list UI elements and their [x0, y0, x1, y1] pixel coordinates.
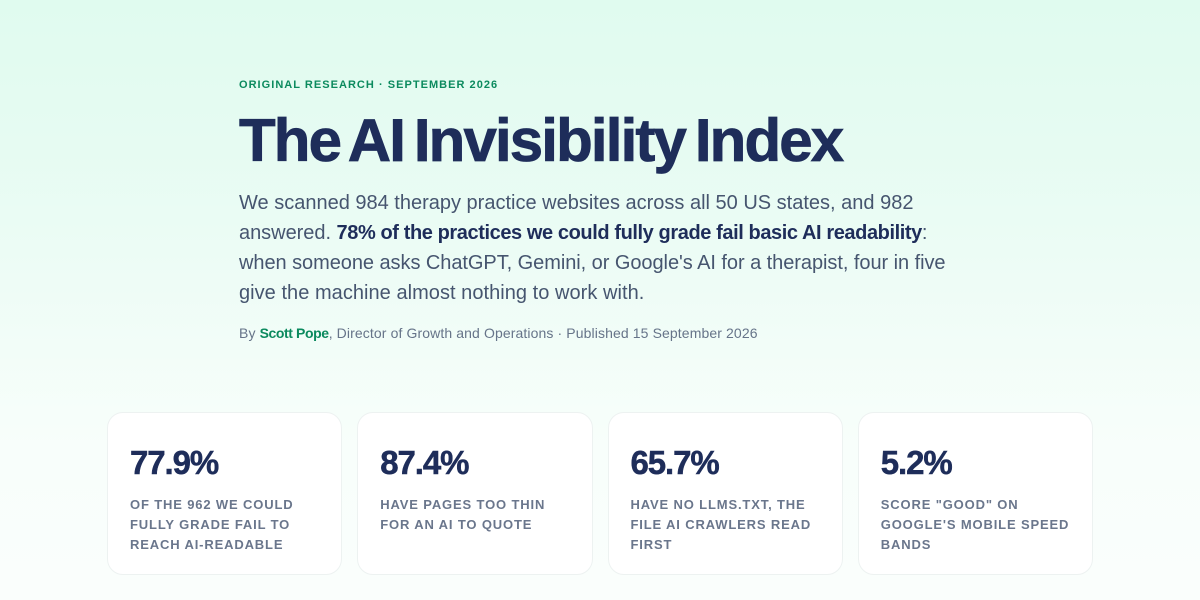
stat label [130, 497, 294, 552]
stat value: 65.7% [630, 444, 719, 481]
title: The AI Invisibility Index [239, 107, 842, 174]
stat card 4 [858, 412, 1093, 575]
stat label: FULLY GRADE FAIL TO [130, 517, 290, 532]
stat label: FOR AN AI TO QUOTE [380, 517, 532, 532]
stat label [380, 497, 545, 532]
eyebrow: ORIGINAL RESEARCH · SEPTEMBER 2026 [239, 79, 498, 91]
stat label [630, 497, 811, 552]
byline: By Scott Pope, Director of Growth and Operations · Published 15 September 2026 [239, 325, 758, 341]
stat card 2 [357, 412, 592, 575]
stat card 1 [107, 412, 342, 575]
stat label: FIRST [630, 537, 672, 552]
stat value: 5.2% [881, 444, 952, 481]
stat card 3 [608, 412, 843, 575]
stat label: HAVE PAGES TOO THIN [380, 497, 545, 512]
stat label: BANDS [881, 537, 931, 552]
stat value: 87.4% [380, 444, 468, 481]
stat label: REACH AI-READABLE [130, 537, 283, 552]
stat label: GOOGLE'S MOBILE SPEED [881, 517, 1069, 532]
intro paragraph [239, 192, 945, 304]
stat label: OF THE 962 WE COULD [130, 497, 294, 512]
intro paragraph: give the machine almost nothing to work with. [239, 282, 644, 304]
intro paragraph: We scanned 984 therapy practice websites across all 50 US states, and 982 [239, 192, 913, 214]
stat label: SCORE "GOOD" ON [881, 497, 1019, 512]
stat value: 77.9% [130, 444, 218, 481]
stat label [881, 497, 1069, 552]
stat label: FILE AI CRAWLERS READ [630, 517, 811, 532]
stat label: HAVE NO LLMS.TXT, THE [630, 497, 806, 512]
intro paragraph: answered. 78% of the practices we could fully grade fail basic AI readability: [239, 222, 927, 244]
intro paragraph: when someone asks ChatGPT, Gemini, or Google's AI for a therapist, four in five [239, 252, 945, 274]
